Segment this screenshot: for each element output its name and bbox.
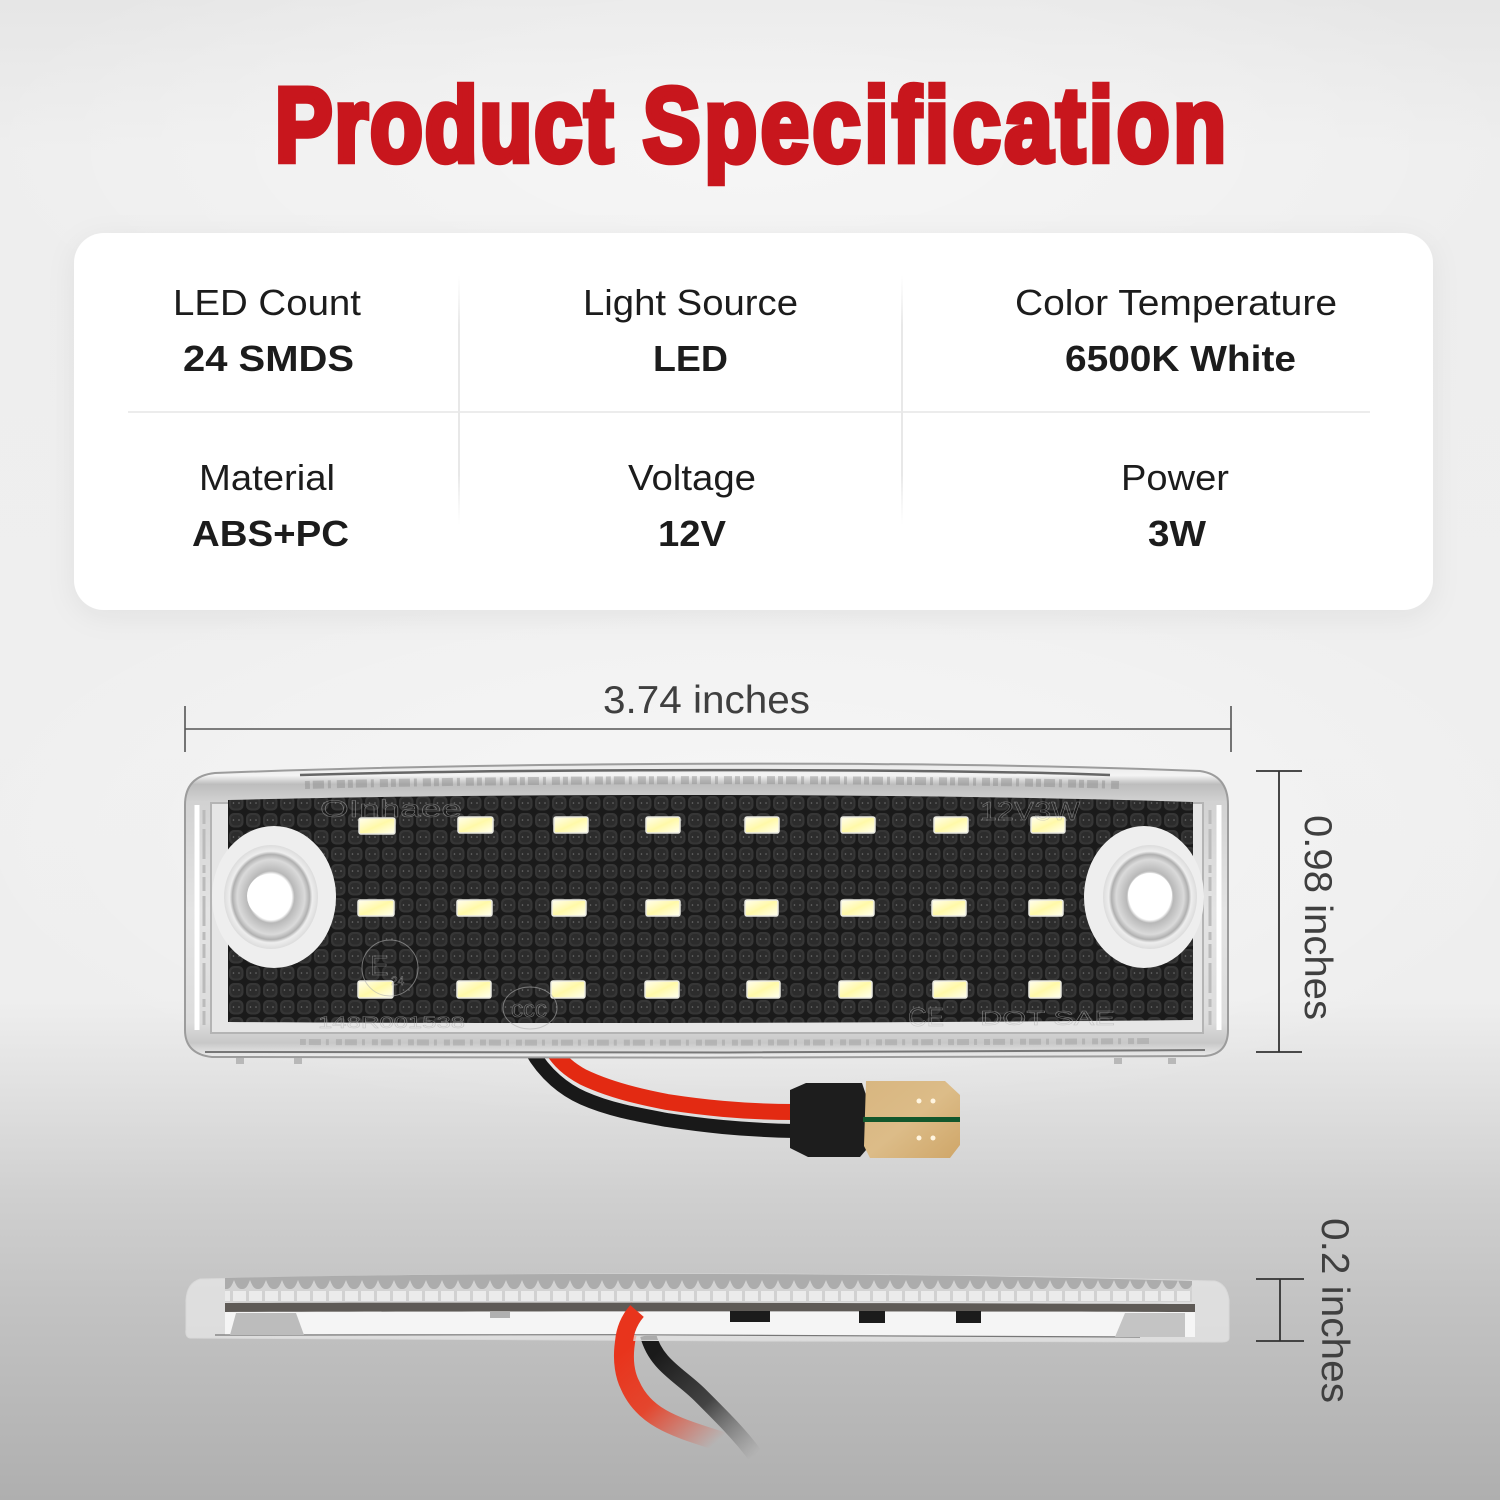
spec: voltage: Voltage	[628, 457, 756, 498]
bottom edge	[215, 1335, 1140, 1337]
spec: light source: Light Source	[583, 282, 798, 323]
embossed markings: OInhaee	[320, 796, 462, 823]
spec: light source	[583, 282, 798, 379]
spec: LED count	[173, 282, 361, 379]
embossed markings: 24	[391, 974, 405, 988]
spec: power: Power	[1121, 457, 1229, 498]
side view wires	[624, 1308, 755, 1455]
black wire	[531, 1050, 795, 1131]
clear lens frame	[185, 764, 1228, 1058]
mount cones	[230, 1313, 304, 1335]
spec: voltage	[628, 457, 756, 554]
embossed markings	[318, 796, 1115, 1032]
spec: LED count: 24 SMDS	[183, 338, 354, 379]
spec: power: 3W	[1148, 513, 1206, 554]
embossed markings: 148R001538	[318, 1013, 465, 1032]
red wire entry	[624, 1311, 637, 1342]
frame tabs	[236, 1058, 1176, 1064]
circuit board edge	[225, 1303, 1195, 1312]
product: side view of LED lamp	[186, 1274, 1229, 1342]
spec: material	[192, 457, 349, 554]
LEDs	[358, 817, 1065, 998]
spec: light source: LED	[653, 338, 728, 379]
title: Product	[275, 67, 615, 184]
spec: LED count: LED Count	[173, 282, 361, 323]
red wire	[624, 1308, 722, 1442]
embossed markings: E	[370, 950, 389, 981]
SMD chips	[730, 1311, 981, 1323]
panel: specification table	[74, 233, 1433, 610]
cable with connector	[531, 1050, 960, 1158]
ribbed upper glass	[225, 1274, 1192, 1302]
embossed markings: ccc	[511, 996, 547, 1023]
embossed markings: DOT SAE	[980, 1008, 1115, 1030]
title: Specification	[643, 67, 1230, 184]
dimension: width 3.74 inches	[185, 679, 1231, 752]
spec: material: ABS+PC	[192, 513, 349, 554]
spec: color temperature: Color Temperature	[1015, 282, 1337, 323]
black wire	[648, 1335, 755, 1455]
dimension: height 0.98 inches: 0.98 inches	[1296, 815, 1339, 1020]
spec: voltage: 12V	[658, 513, 726, 554]
lower clear band	[225, 1312, 1195, 1337]
gold terminal	[863, 1081, 960, 1158]
mounting hole left	[212, 826, 336, 968]
mounting hole right	[1084, 826, 1204, 968]
dimension: thickness 0.2 inches	[1256, 1218, 1356, 1403]
red wire	[553, 1050, 795, 1112]
spec: power	[1121, 457, 1229, 554]
dimension: thickness 0.2 inches: 0.2 inches	[1313, 1218, 1356, 1403]
dimension: width 3.74 inches: 3.74 inches	[603, 679, 810, 722]
title	[275, 67, 1230, 184]
dimension: height 0.98 inches	[1256, 771, 1339, 1052]
spec: color temperature: 6500K White	[1065, 338, 1296, 379]
embossed markings: 12V3W	[980, 796, 1081, 826]
spec: color temperature	[1015, 282, 1337, 379]
product: front view of LED lamp	[185, 764, 1228, 1064]
embossed markings: CE	[908, 1002, 944, 1032]
heat shrink	[790, 1083, 866, 1157]
black circuit board	[228, 795, 1193, 1023]
spec: material: Material	[199, 457, 335, 498]
lens body	[186, 1274, 1229, 1342]
